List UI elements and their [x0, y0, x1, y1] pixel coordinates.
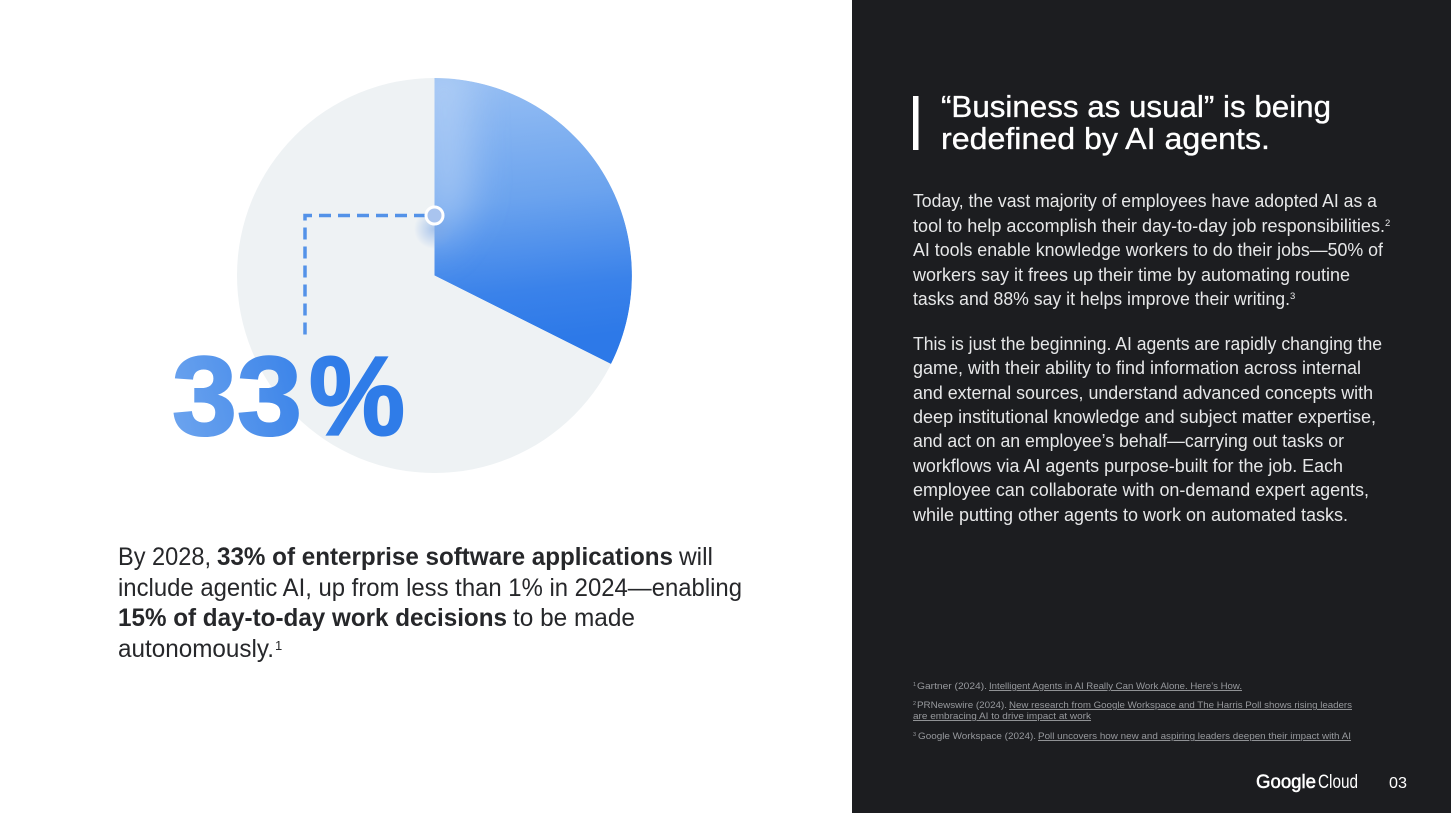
body paragraph 2: deep institutional knowledge and subject matter expertise,	[913, 407, 1376, 427]
lead paragraph: autonomously.	[118, 635, 274, 663]
marker dot	[426, 207, 443, 224]
footnotes: 1	[913, 682, 916, 688]
body paragraph 1: 2	[1385, 218, 1390, 229]
big number: 33%: %	[309, 334, 405, 458]
panel: left white background	[0, 0, 852, 813]
footnotes: Google Workspace (2024).	[918, 730, 1036, 741]
footnotes: Poll uncovers how new and aspiring leaders deepen their impact with AI	[1038, 730, 1351, 741]
body paragraph 1: 3	[1290, 291, 1295, 302]
footnotes: 3	[913, 732, 916, 738]
footnotes: 2	[913, 701, 916, 707]
lead paragraph: 1	[275, 638, 282, 653]
body paragraph 2	[912, 334, 1382, 525]
footnotes: PRNewswire (2024).	[917, 699, 1007, 710]
panel: right dark background	[852, 0, 1451, 813]
logo: Google Cloud: Cloud	[1318, 772, 1358, 793]
body paragraph 1: tool to help accomplish their day-to-day job responsibilities.	[913, 216, 1385, 236]
body paragraph 1: Today, the vast majority of employees have adopted AI as a	[913, 191, 1378, 211]
heading accent bar	[913, 96, 918, 150]
lead paragraph: By 2028,	[118, 543, 211, 571]
body paragraph 1: workers say it frees up their time by automating routine	[912, 265, 1350, 285]
logo: Google Cloud	[1256, 772, 1358, 793]
heading: “Business as usual” is being	[941, 89, 1331, 124]
body paragraph 2: and external sources, understand advanced concepts with	[913, 383, 1373, 403]
body paragraph 1: AI tools enable knowledge workers to do their jobs—50% of	[913, 240, 1384, 260]
body paragraph 2: and act on an employee’s behalf—carrying out tasks or	[913, 431, 1344, 451]
body paragraph 1: tasks and 88% say it helps improve their writing.	[913, 289, 1290, 309]
body paragraph 2: game, with their ability to find information across internal	[913, 358, 1361, 378]
lead paragraph: will	[678, 543, 713, 571]
logo: Google Cloud: Google	[1256, 772, 1316, 793]
heading	[941, 89, 1331, 156]
body paragraph 2: while putting other agents to work on automated tasks.	[912, 505, 1348, 525]
body paragraph 1	[912, 191, 1390, 309]
lead paragraph: to be made	[513, 604, 635, 632]
footnotes: Intelligent Agents in AI Really Can Work Alone. Here’s How.	[989, 680, 1242, 691]
body paragraph 2: workflows via AI agents purpose-built for the job. Each	[912, 456, 1343, 476]
body paragraph 2: employee can collaborate with on-demand expert agents,	[913, 480, 1369, 500]
footnotes: New research from Google Workspace and The Harris Poll shows rising leaders	[1009, 699, 1352, 710]
heading: redefined by AI agents.	[941, 121, 1270, 156]
pie highlighted wedge	[434, 78, 632, 364]
pie base circle	[237, 78, 632, 473]
body paragraph 2: This is just the beginning. AI agents are rapidly changing the	[913, 334, 1382, 354]
pie chart: 33 percent share	[237, 60, 632, 473]
big number: 33%	[172, 334, 405, 458]
page number: 03	[1389, 775, 1407, 792]
lead paragraph: 33% of enterprise software applications	[217, 543, 673, 571]
lead paragraph: 15% of day-to-day work decisions	[118, 604, 507, 632]
dashed leader line	[305, 216, 426, 334]
big number: 33%: 33	[172, 334, 302, 458]
footnotes: Gartner (2024).	[917, 680, 987, 691]
footnotes	[913, 680, 1352, 741]
footnotes: are embracing AI to drive impact at work	[913, 710, 1091, 721]
glow below marker	[414, 209, 454, 249]
lead paragraph: include agentic AI, up from less than 1% in 2024—enabling	[118, 574, 742, 602]
lead paragraph	[118, 543, 742, 663]
